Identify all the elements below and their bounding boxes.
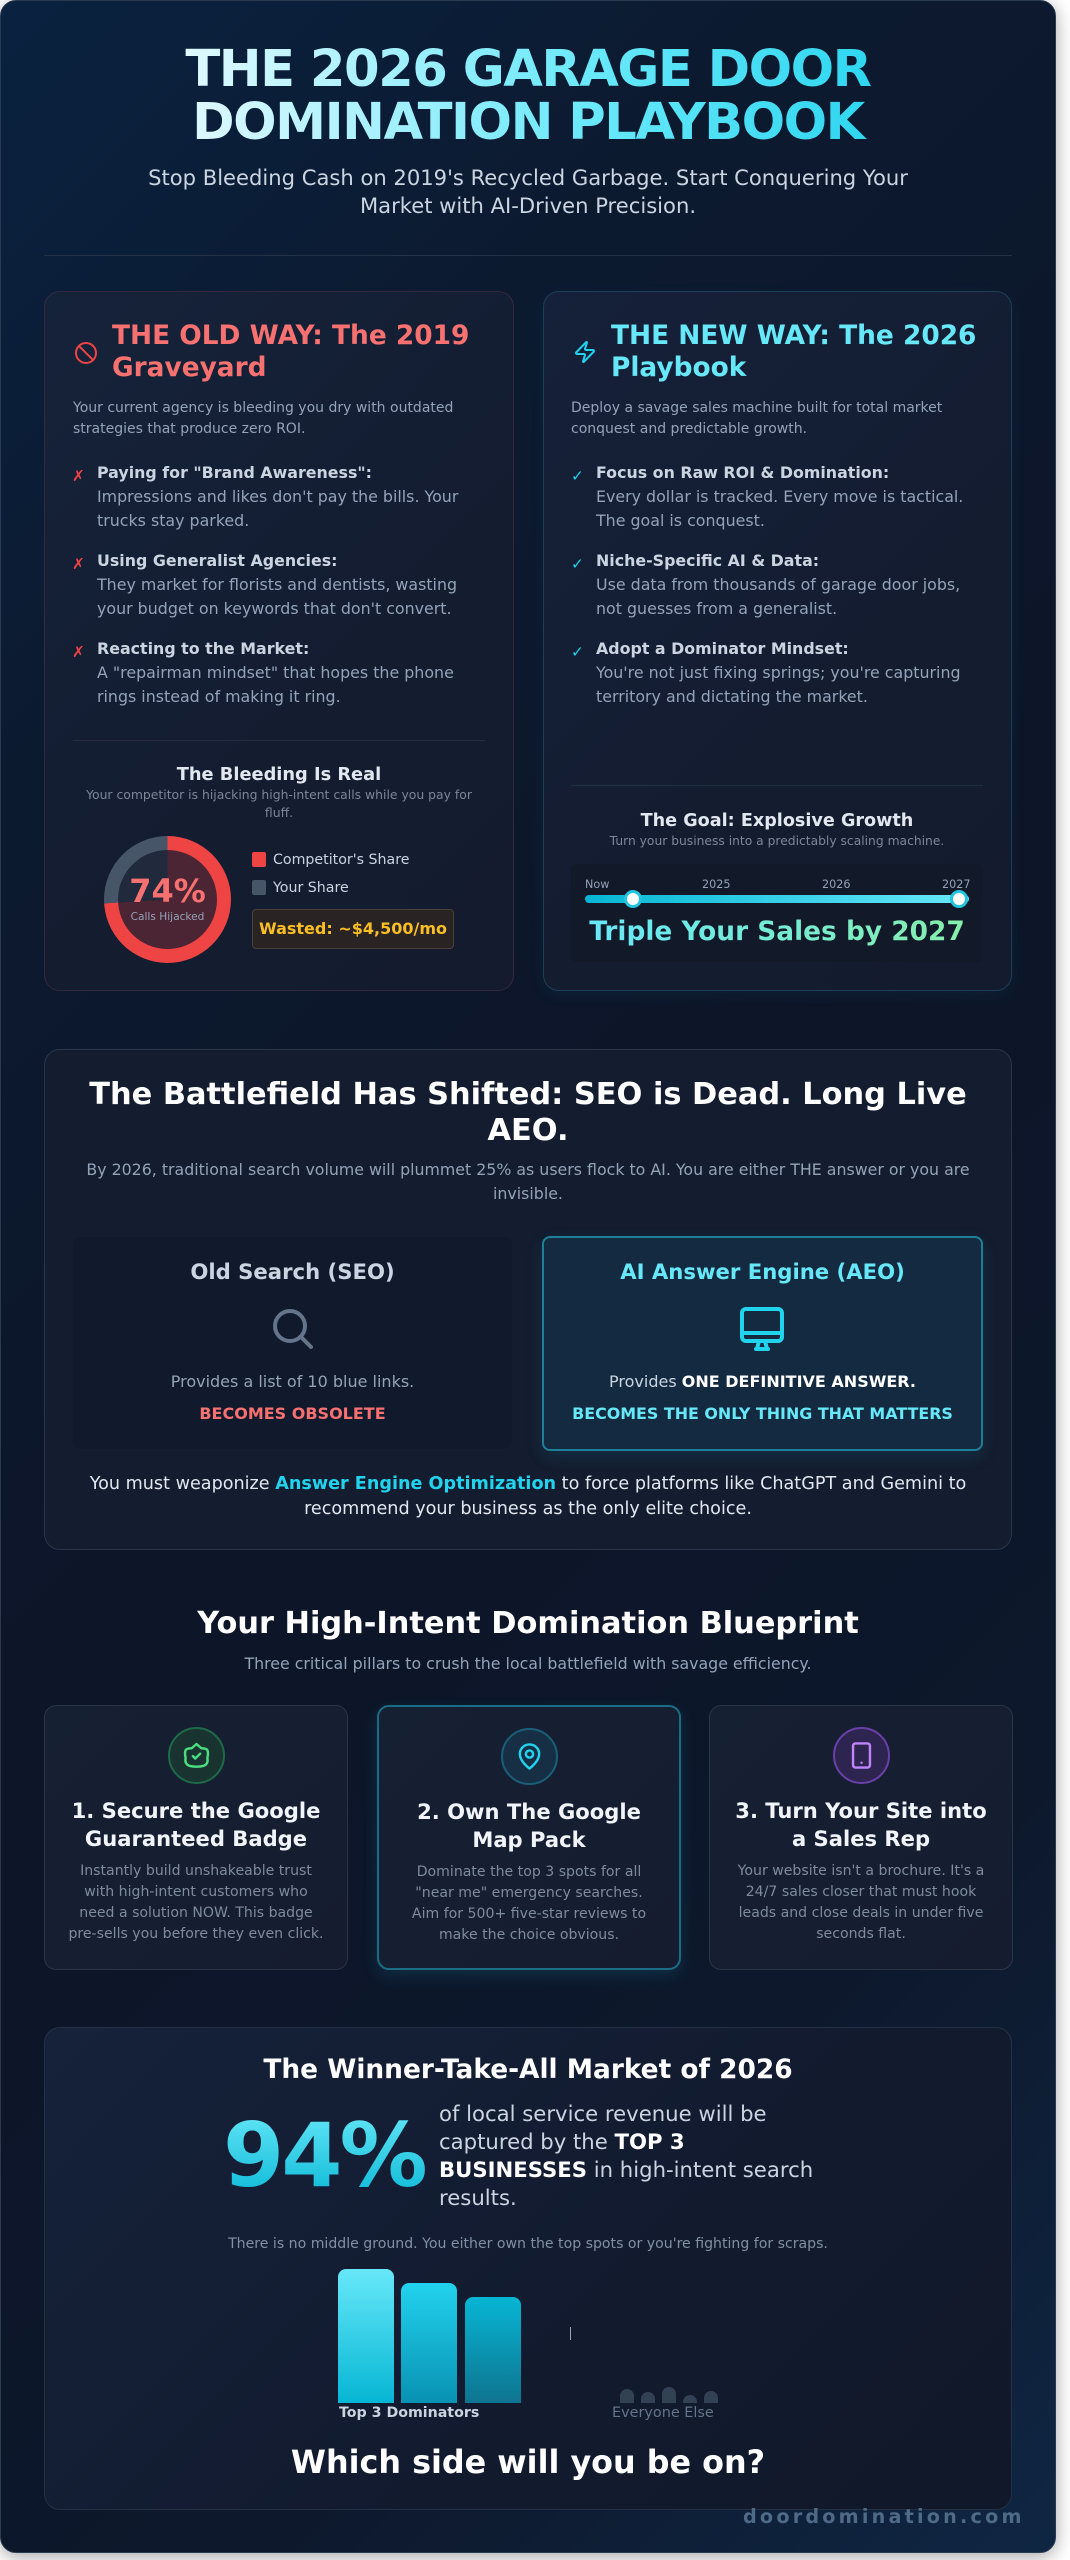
card text: Dominate the top 3 spots for all — [417, 1864, 641, 1880]
list item: reacting to the market: A "repairman mindset" that hopes the phone — [97, 663, 454, 682]
card text: need a solution NOW. This badge — [79, 1905, 313, 1921]
card text: 24/7 sales closer that must hook — [746, 1884, 976, 1900]
heading: new way — [611, 320, 976, 383]
card: google guaranteed — [44, 1705, 348, 1970]
text: revenue capture: BUSINESSES in high-intent search — [439, 2157, 813, 2182]
card text: with high-intent customers who — [84, 1884, 308, 1900]
list item: focus on ROI: Every dollar is tracked. Every move is tactical. — [596, 487, 963, 506]
year label: 2027: 2027 — [942, 878, 970, 891]
card: old search — [73, 1237, 512, 1449]
heading: battlefield: The Battlefield Has Shifted: SEO is Dead. Long Live — [89, 1077, 967, 1112]
progress track — [585, 895, 969, 903]
text: revenue capture: of local service revenue will be — [439, 2101, 767, 2126]
heading: SEO: Old Search (SEO) — [190, 1259, 395, 1284]
bar 1 — [338, 2269, 394, 2403]
card title: a Sales Rep — [792, 1826, 930, 1851]
heading: battlefield: AEO. — [488, 1113, 568, 1148]
caption: goal: Turn your business into a predictably scaling machine. — [610, 834, 944, 848]
heading: new way: THE NEW WAY: The 2026 — [611, 320, 976, 351]
heading: battlefield — [89, 1077, 967, 1148]
panel: winner-take-all market — [44, 2027, 1012, 2510]
list item: dominator mindset: ✓ — [571, 643, 584, 661]
icon: monitor — [740, 1307, 784, 1351]
legend: your share: Your Share — [273, 880, 349, 896]
callout: wasted budget: Wasted: ~$4,500/mo — [259, 919, 447, 938]
text: revenue capture — [439, 2101, 813, 2210]
body: battlefield — [86, 1160, 970, 1203]
closing question: Which side will you be on? — [291, 2444, 765, 2481]
heading: new way: Playbook — [611, 352, 746, 383]
heading: old way — [112, 320, 469, 383]
title — [185, 39, 871, 152]
list item: niche-specific AI: Niche-Specific AI & Data: — [596, 551, 819, 570]
text: one definitive answer: Provides ONE DEFINITIVE ANSWER. — [609, 1372, 916, 1391]
label: everyone else: Everyone Else — [612, 2405, 714, 2421]
text: weaponize AEO — [90, 1474, 966, 1519]
donut chart: 74% calls hijacked — [104, 836, 231, 963]
list item: niche-specific AI: ✓ — [571, 555, 584, 573]
intro text: old way: strategies that produce zero ROI. — [73, 421, 305, 437]
body: battlefield: invisible. — [493, 1184, 563, 1203]
intro text: old way — [73, 400, 453, 437]
heading: AEO: AI Answer Engine (AEO) — [620, 1259, 905, 1284]
list item: dominator mindset — [571, 639, 961, 706]
card text: leads and close deals in under five — [739, 1905, 983, 1921]
small bar 1 — [620, 2389, 634, 2403]
timeline chart — [571, 864, 983, 962]
panel: the new way — [542, 291, 1012, 991]
heading: the goal: The Goal: Explosive Growth — [641, 811, 913, 831]
list item: focus on ROI: Focus on Raw ROI & Domination: — [596, 463, 889, 482]
bar chart: everyone else — [620, 2387, 718, 2403]
card text: seconds flat. — [816, 1926, 906, 1942]
small bar 2 — [641, 2392, 655, 2403]
text: revenue capture: results. — [439, 2185, 517, 2210]
list item: reacting to the market: ✗ — [72, 643, 85, 661]
card text — [738, 1863, 984, 1942]
title: THE 2026 GARAGE DOOR — [185, 39, 871, 99]
text: no middle ground: There is no middle ground. You either own the top spots or you're fighting for scraps. — [228, 2236, 828, 2252]
card text: pre-sells you before they even click. — [68, 1926, 324, 1942]
year label: 2026: 2026 — [822, 878, 850, 891]
card text: Instantly build unshakeable trust — [80, 1863, 312, 1879]
goal statement: Triple Your Sales by 2027 — [589, 916, 965, 947]
list item: generalist agencies: Using Generalist Agencies: — [97, 551, 338, 570]
card title: Guaranteed Badge — [85, 1826, 307, 1851]
card text: Aim for 500+ five-star reviews to — [412, 1906, 646, 1922]
subtitle: Market with AI-Driven Precision. — [360, 193, 696, 218]
subheading: blueprint: Three critical pillars to crush the local battlefield with savage efficiency. — [244, 1654, 812, 1673]
heading: winner take all: The Winner-Take-All Market of 2026 — [263, 2054, 793, 2085]
card text — [68, 1863, 324, 1942]
marker: end — [950, 890, 968, 908]
icon: magnifier — [273, 1309, 313, 1350]
list item: generalist agencies: They market for florists and dentists, wasting — [97, 575, 457, 594]
heading: old way: THE OLD WAY: The 2019 — [112, 320, 469, 351]
list item: reacting to the market: Reacting to the Market: — [97, 639, 309, 658]
body: battlefield: By 2026, traditional search volume will plummet 25% as users flock to AI. You are either THE answer or you are — [86, 1160, 970, 1179]
intro text: new way: conquest and predictable growth. — [571, 421, 807, 437]
title: DOMINATION PLAYBOOK — [192, 92, 864, 152]
card title — [735, 1798, 987, 1851]
heading: the bleeding is real: The Bleeding Is Real — [177, 764, 381, 785]
subtitle — [148, 165, 908, 218]
list item: brand awareness: trucks stay parked. — [97, 511, 249, 530]
verdict: obsolete: BECOMES OBSOLETE — [199, 1404, 386, 1423]
card: map pack — [377, 1705, 681, 1970]
list item: niche-specific AI: not guesses from a generalist. — [596, 599, 837, 618]
donut label: Calls Hijacked — [131, 911, 204, 923]
bar 3 — [465, 2297, 521, 2403]
list item: reacting to the market — [72, 639, 454, 706]
bar chart: top 3 dominators — [338, 2269, 521, 2403]
intro text: old way: Your current agency is bleeding you dry with outdated — [73, 400, 453, 416]
year label: 2025: 2025 — [702, 878, 730, 891]
list item: niche-specific AI — [571, 551, 960, 618]
card text: Your website isn't a brochure. It's a — [738, 1863, 984, 1879]
small bar 5 — [704, 2391, 718, 2403]
list item: dominator mindset: Adopt a Dominator Mindset: — [596, 639, 849, 658]
card title — [417, 1799, 641, 1852]
text: revenue capture: captured by the TOP 3 — [439, 2129, 685, 2154]
intro text: new way: Deploy a savage sales machine built for total market — [571, 400, 942, 416]
card: site as sales rep — [709, 1705, 1013, 1970]
marker: start — [624, 890, 642, 908]
list item: brand awareness: ✗ — [72, 467, 85, 485]
label: top 3: Top 3 Dominators — [339, 2405, 479, 2421]
stat: 94%: 94% — [223, 2104, 425, 2207]
list item: generalist agencies — [72, 551, 457, 618]
text: ten blue links: Provides a list of 10 blue links. — [171, 1372, 414, 1391]
donut value: 74% — [129, 872, 206, 910]
text: weaponize AEO: recommend your business as the only elite choice. — [304, 1499, 752, 1519]
list item: generalist agencies: ✗ — [72, 555, 85, 573]
card text — [412, 1864, 646, 1943]
card: AI answer engine — [542, 1236, 983, 1451]
list item: generalist agencies: your budget on keywords that don't convert. — [97, 599, 452, 618]
divider tick — [570, 2327, 571, 2340]
caption: bleeding — [86, 787, 472, 820]
list item: dominator mindset: territory and dictating the market. — [596, 687, 868, 706]
icon: tablet — [833, 1727, 890, 1784]
card title: 1. Secure the Google — [72, 1798, 320, 1823]
text: weaponize AEO: You must weaponize Answer Engine Optimization to force platforms like ChatGPT and Gemini to — [90, 1474, 966, 1494]
list item: focus on ROI: The goal is conquest. — [596, 511, 765, 530]
intro text: new way — [571, 400, 942, 437]
callout: wasted budget — [252, 909, 454, 949]
card text: make the choice obvious. — [439, 1927, 619, 1943]
caption: bleeding: fluff. — [265, 804, 293, 820]
list item: niche-specific AI: Use data from thousands of garage door jobs, — [596, 575, 960, 594]
card title — [72, 1798, 320, 1851]
list item: focus on ROI — [571, 463, 963, 530]
verdict: only thing that matters: BECOMES THE ONLY THING THAT MATTERS — [572, 1404, 953, 1423]
icon: map pin — [501, 1728, 558, 1785]
list item: brand awareness: Impressions and likes don't pay the bills. Your — [97, 487, 458, 506]
icon: shield check — [168, 1727, 225, 1784]
card title: 2. Own The Google — [417, 1799, 641, 1824]
heading: blueprint: Your High-Intent Domination Blueprint — [197, 1606, 859, 1641]
small bar 3 — [662, 2387, 676, 2403]
card text: "near me" emergency searches. — [415, 1885, 643, 1901]
year label: now: Now — [585, 878, 609, 891]
heading: old way: Graveyard — [112, 352, 267, 383]
card title: 3. Turn Your Site into — [735, 1798, 987, 1823]
list item: dominator mindset: You're not just fixing springs; you're capturing — [596, 663, 961, 682]
subtitle: Stop Bleeding Cash on 2019's Recycled Garbage. Start Conquering Your — [148, 165, 908, 190]
footer: website: doordomination.com — [743, 2505, 1025, 2528]
panel: battlefield — [44, 1049, 1012, 1550]
small bar 4 — [683, 2395, 697, 2403]
panel: the old way — [44, 291, 514, 991]
list item: focus on ROI: ✓ — [571, 467, 584, 485]
card title: Map Pack — [472, 1827, 586, 1852]
icon: ban — [75, 342, 97, 364]
list item: brand awareness — [72, 463, 458, 530]
bar 2 — [401, 2283, 457, 2403]
caption: bleeding: Your competitor is hijacking high-intent calls while you pay for — [86, 787, 472, 802]
list item: brand awareness: Paying for "Brand Awareness": — [97, 463, 372, 482]
icon: zap — [574, 341, 595, 363]
list item: reacting to the market: rings instead of making it ring. — [97, 687, 341, 706]
legend: competitor's share: Competitor's Share — [273, 852, 409, 868]
